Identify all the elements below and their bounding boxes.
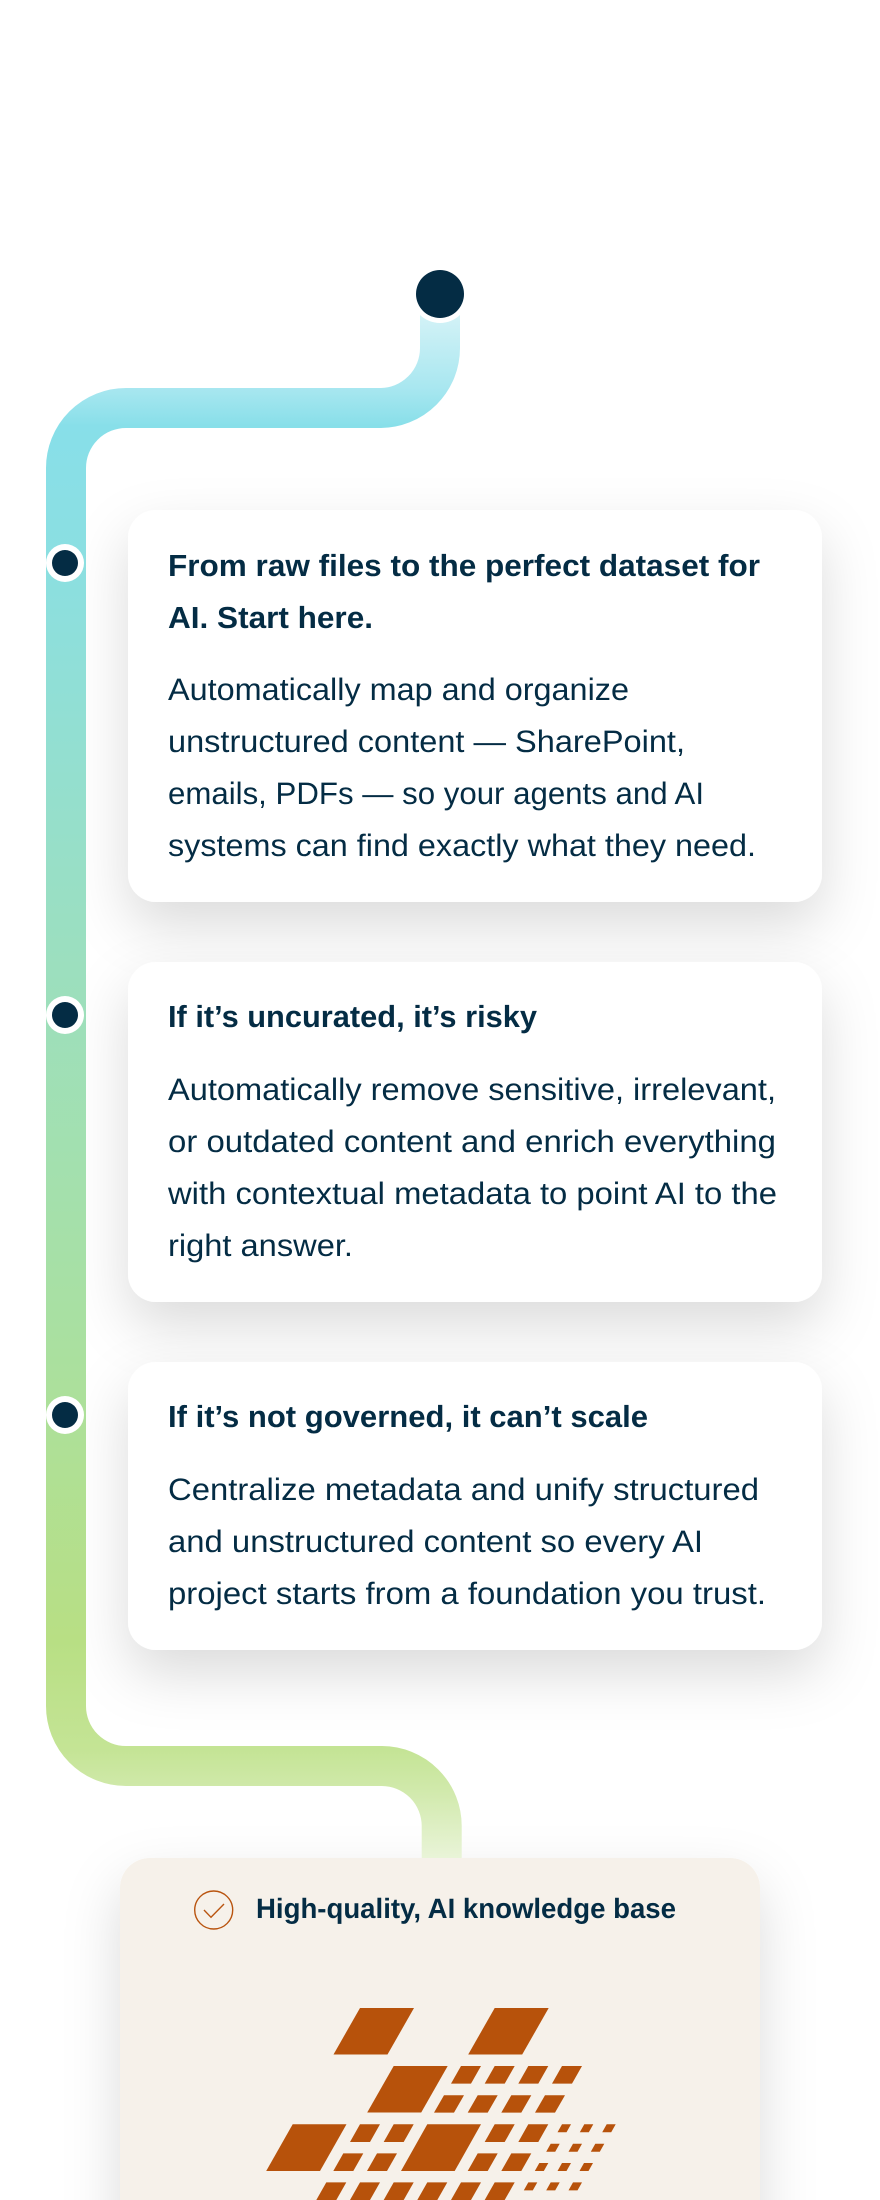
heading: uncurated card: If it’s uncurated, it’s risky — [168, 1000, 537, 1034]
text: uncurated body: right answer. — [168, 1228, 353, 1263]
text: governed body: Centralize metadata and unify structured — [168, 1472, 759, 1507]
timeline pipe — [66, 300, 442, 1858]
panel: uncurated card — [128, 962, 822, 1302]
text: uncurated body: with contextual metadata to point AI to the — [167, 1176, 777, 1211]
text: uncurated body — [167, 1072, 777, 1263]
heading: raw files card: From raw files to the perfect dataset for — [168, 549, 760, 583]
text: raw files body: Automatically map and organize — [168, 672, 629, 707]
node: raw files step — [46, 544, 84, 582]
heading: raw files card — [168, 549, 760, 635]
text: raw files body — [168, 672, 756, 863]
node: uncurated step — [46, 996, 84, 1034]
text: raw files body: emails, PDFs — so your agents and AI — [168, 776, 704, 811]
text: governed body: project starts from a foundation you trust. — [168, 1576, 766, 1611]
icon: dissolving parallelogram grid — [266, 2008, 616, 2200]
heading: knowledge base: High-quality, AI knowledge base — [256, 1893, 676, 1924]
panel: knowledge base card — [120, 1858, 760, 2200]
panel: raw files card — [128, 510, 822, 902]
heading: raw files card: AI. Start here. — [168, 601, 373, 635]
text: governed body — [168, 1472, 766, 1611]
node: governed step — [46, 1396, 84, 1434]
text: raw files body: systems can find exactly what they need. — [168, 828, 756, 863]
text: uncurated body: or outdated content and enrich everything — [168, 1124, 776, 1159]
text: raw files body: unstructured content — SharePoint, — [168, 724, 685, 759]
text: uncurated body: Automatically remove sensitive, irrelevant, — [168, 1072, 776, 1107]
text: governed body: and unstructured content so every AI — [168, 1524, 703, 1559]
panel: governed card — [128, 1362, 822, 1650]
heading: governed card: If it’s not governed, it can’t scale — [168, 1400, 648, 1434]
icon: check mark in circle — [195, 1891, 233, 1929]
start node — [411, 265, 469, 323]
